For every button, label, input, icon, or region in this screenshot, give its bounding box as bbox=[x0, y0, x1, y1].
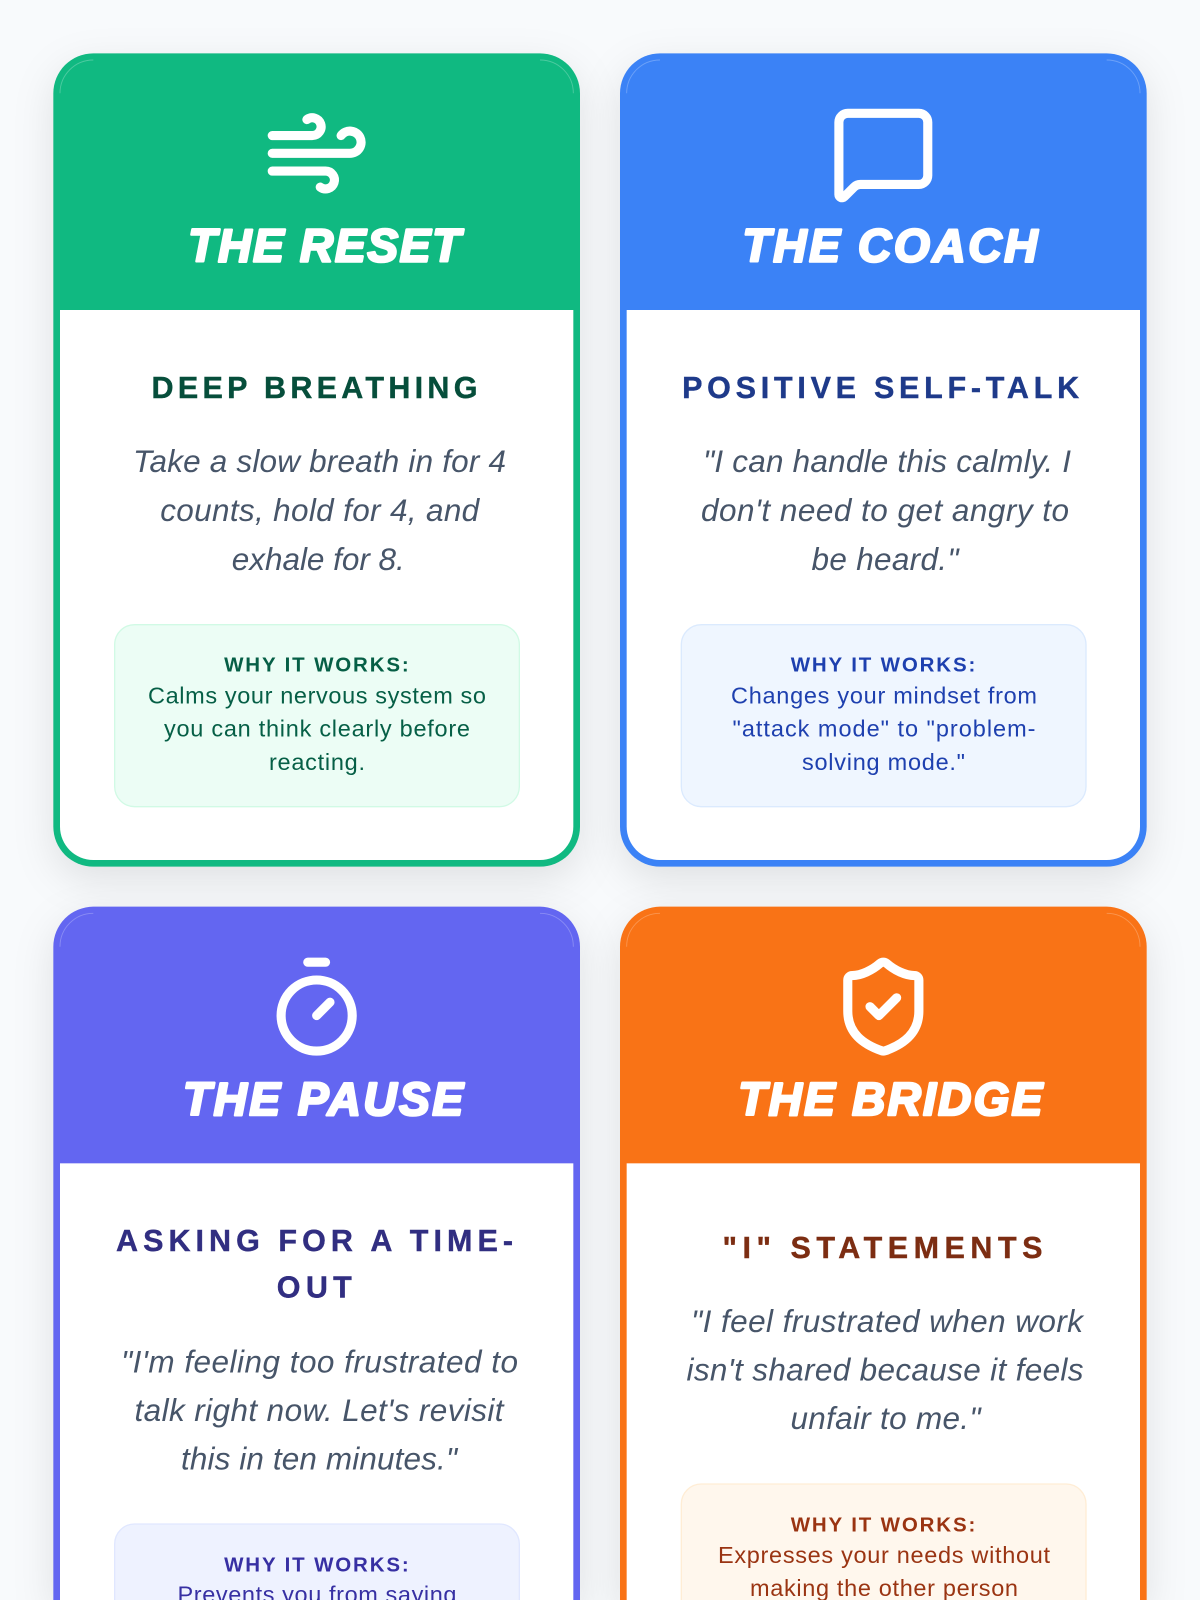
description bbox=[121, 1344, 518, 1476]
icon: stopwatch bbox=[281, 962, 352, 1051]
callout: why it works: WHY IT WORKS: bbox=[791, 654, 975, 677]
card frame bbox=[53, 907, 580, 1600]
description: don't need to get angry to bbox=[701, 492, 1069, 528]
callout: why it works: you can think clearly before bbox=[164, 716, 470, 742]
callout: why it works: WHY IT WORKS: bbox=[224, 654, 409, 677]
description bbox=[701, 443, 1071, 577]
callout: why it works: solving mode." bbox=[802, 749, 965, 775]
card body background bbox=[60, 1163, 573, 1600]
title: THE COACH bbox=[742, 220, 1038, 272]
heading: ASKING FOR A TIME- bbox=[116, 1224, 513, 1258]
title: THE BRIDGE bbox=[738, 1073, 1044, 1125]
heading: OUT bbox=[277, 1270, 352, 1304]
icon: shield with check bbox=[848, 962, 919, 1051]
heading bbox=[116, 1224, 513, 1304]
card frame bbox=[620, 907, 1147, 1600]
panel: the reset bbox=[53, 53, 580, 867]
panel: the bridge bbox=[620, 907, 1147, 1600]
description bbox=[686, 1303, 1085, 1436]
card body background bbox=[627, 1163, 1140, 1600]
description: this in ten minutes." bbox=[181, 1440, 459, 1476]
description: Take a slow breath in for 4 bbox=[133, 443, 506, 479]
description bbox=[133, 443, 506, 577]
callout: why it works bbox=[681, 1484, 1086, 1600]
callout: why it works bbox=[115, 1524, 519, 1600]
description: "I'm feeling too frustrated to bbox=[121, 1344, 518, 1380]
title: THE PAUSE bbox=[183, 1073, 464, 1125]
heading: DEEP BREATHING bbox=[152, 371, 478, 405]
callout: why it works bbox=[681, 625, 1086, 807]
callout: why it works: Expresses your needs without bbox=[718, 1542, 1050, 1568]
callout: why it works: Changes your mindset from bbox=[731, 682, 1037, 708]
description: "I feel frustrated when work bbox=[691, 1303, 1085, 1339]
heading: "I" STATEMENTS bbox=[722, 1231, 1042, 1265]
icon: wind bbox=[272, 118, 361, 189]
description: counts, hold for 4, and bbox=[160, 492, 481, 528]
description: "I can handle this calmly. I bbox=[703, 443, 1071, 479]
card body background bbox=[627, 310, 1140, 860]
description: unfair to me." bbox=[790, 1400, 982, 1436]
callout: why it works: WHY IT WORKS: bbox=[791, 1514, 975, 1537]
callout: why it works: reacting. bbox=[269, 749, 365, 775]
card body background bbox=[60, 310, 573, 860]
description: exhale for 8. bbox=[232, 541, 405, 577]
card frame bbox=[620, 53, 1147, 867]
description: isn't shared because it feels bbox=[686, 1352, 1084, 1388]
card frame bbox=[53, 53, 580, 867]
callout: why it works bbox=[115, 625, 519, 807]
callout: why it works: WHY IT WORKS: bbox=[224, 1554, 409, 1577]
callout: why it works: "attack mode" to "problem- bbox=[732, 716, 1036, 742]
callout: why it works: Calms your nervous system so bbox=[148, 682, 486, 708]
description: talk right now. Let's revisit bbox=[134, 1392, 505, 1428]
title: THE RESET bbox=[188, 220, 464, 272]
icon: speech bubble bbox=[839, 113, 928, 198]
panel: the coach bbox=[620, 53, 1147, 867]
description: be heard." bbox=[812, 541, 960, 577]
panel: the pause bbox=[53, 907, 580, 1600]
heading: POSITIVE SELF-TALK bbox=[682, 371, 1079, 405]
